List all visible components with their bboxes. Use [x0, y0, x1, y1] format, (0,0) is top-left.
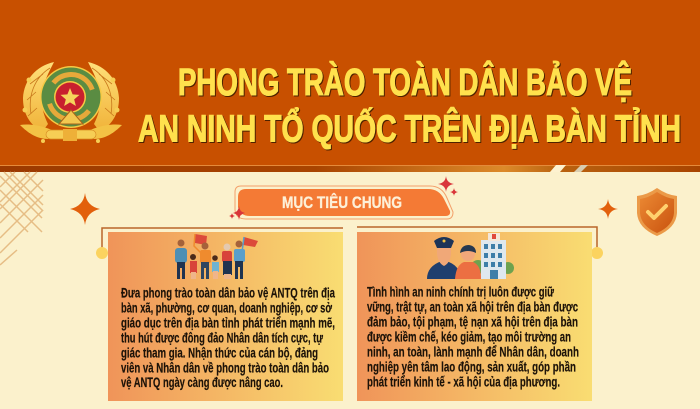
text block: right: được kiềm chế, kéo giảm, tạo môi trường an: [367, 328, 571, 344]
wreath right: [88, 62, 119, 132]
sparkles: red around pill: [229, 176, 458, 220]
text block: left: Đưa phong trào toàn dân bảo vệ ANTQ trên địa: [121, 284, 335, 300]
text block: right: vững, trật tự, an toàn xã hội trên địa bàn được: [367, 298, 578, 314]
objective heading pill: [235, 186, 453, 219]
text block: right: ninh, an toàn, lành mạnh để Nhân dân, doanh: [367, 344, 579, 360]
text block: left: vệ ANTQ ngày càng được nâng cao.: [121, 374, 283, 390]
wreath left: [23, 62, 54, 132]
icon: family with flags: [175, 234, 258, 279]
text block: left: viên và Nhân dân về phong trào toàn dân bảo: [121, 359, 329, 375]
panel: right goal card: [357, 232, 592, 401]
icon: police officer, citizen and building: [427, 233, 514, 279]
title: [138, 60, 681, 150]
text block: right: nghiệp yên tâm lao động, sản xuất, góp phần: [367, 358, 576, 374]
panel: left goal card: [108, 232, 343, 401]
text block: left: [121, 284, 335, 390]
text block: left: giáo dục trên địa bàn tỉnh phát triển mạnh mẽ,: [121, 314, 335, 330]
text block: right: [367, 284, 579, 390]
sparkle: orange right: [598, 199, 618, 219]
panel: right connector: [357, 227, 603, 259]
text block: left: giác tham gia. Nhận thức của cán bộ, đảng: [121, 344, 318, 360]
header band: [0, 0, 700, 172]
text block: right: đảm bảo, tội phạm, tệ nạn xã hội trên địa bàn: [367, 314, 578, 330]
text block: right: phát triển kinh tế - xã hội của địa phương.: [367, 374, 560, 390]
text block: right: Tình hình an ninh chính trị luôn được giữ: [367, 284, 555, 300]
text block: left: thu hút được đông đảo Nhân dân tích cực, tự: [121, 329, 324, 345]
text block: left: bàn xã, phường, cơ quan, doanh nghiệp, cơ sở: [121, 300, 332, 316]
icon: police emblem: [20, 62, 122, 143]
hatch pattern: [0, 172, 43, 265]
sparkle: large orange left: [70, 193, 100, 225]
icon: shield with check: [637, 188, 677, 236]
panel: left connector: [96, 228, 343, 259]
objective heading pill: MỤC TIÊU CHUNG: [282, 193, 402, 212]
